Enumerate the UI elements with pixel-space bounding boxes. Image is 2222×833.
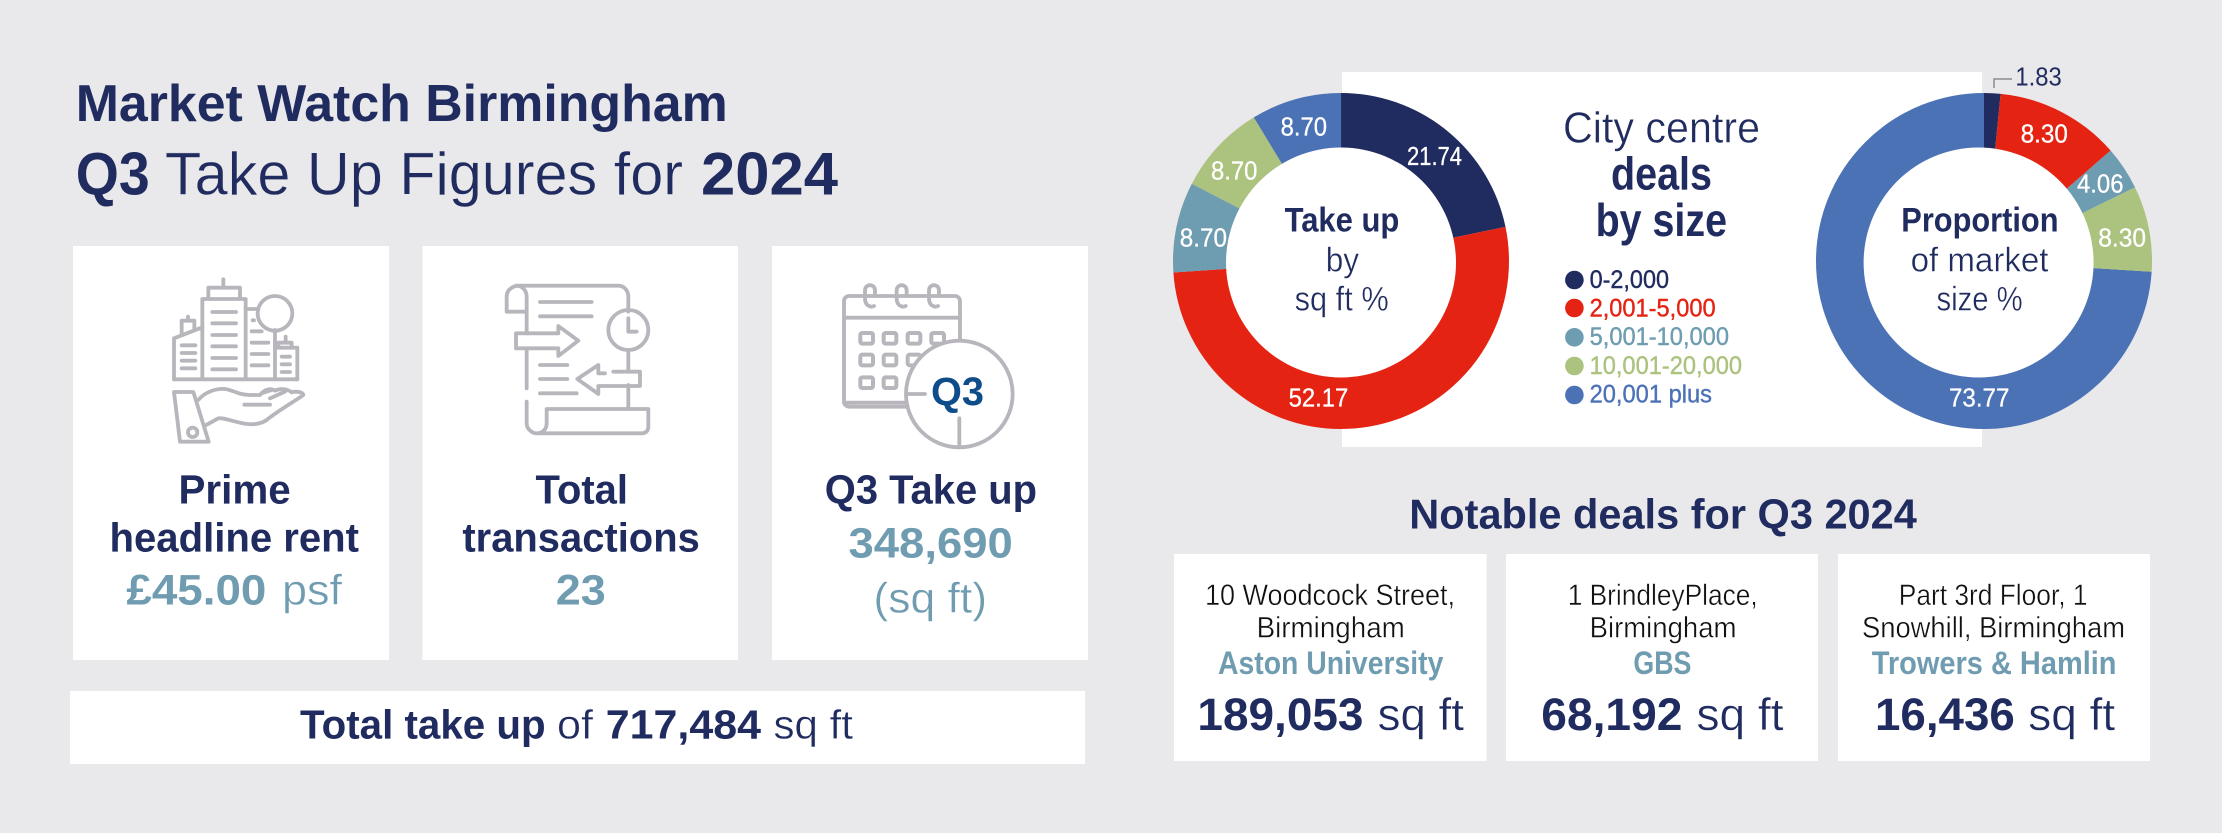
donut chart: take up by sq ft xyxy=(1180,114,1476,413)
heading: city centre deals by size: deals xyxy=(1611,148,1712,200)
legend: 0-2,000 xyxy=(1590,266,1669,294)
card text: Q3 take up: (sq ft) xyxy=(874,574,987,622)
card text: prime headline rent: Prime xyxy=(178,467,291,513)
deal card: GBS: GBS xyxy=(1633,645,1691,681)
card text: prime headline rent: psf xyxy=(282,567,343,615)
donut centre label: proportion of market size % xyxy=(1901,202,2058,319)
deal card: Aston University xyxy=(1174,554,1487,761)
legend: 20,001 plus xyxy=(1590,381,1712,409)
donut centre label: take up by sq ft %: sq ft % xyxy=(1295,281,1389,319)
deal card: GBS: 1 BrindleyPlace, xyxy=(1568,579,1758,612)
heading: city centre deals by size: City centre xyxy=(1563,104,1760,152)
title: Market Watch Birmingham xyxy=(76,75,728,133)
title: Take Up Figures for xyxy=(165,141,683,208)
total take up bar xyxy=(70,691,1085,764)
deal card: Aston University: Birmingham xyxy=(1257,611,1405,644)
legend: 10,001-20,000 xyxy=(1590,352,1742,380)
donut chart: proportion of market size: 4.06 xyxy=(2077,171,2124,199)
total take up bar: of xyxy=(557,702,594,748)
card text: total transactions: transactions xyxy=(462,514,700,560)
deal card: Trowers & Hamlin: sq ft xyxy=(2028,689,2116,740)
donut centre label: proportion of market size %: size % xyxy=(1936,281,2023,319)
donut chart: take up by sq ft: 52.17 xyxy=(1289,385,1348,413)
deal card: GBS xyxy=(1506,554,1818,761)
card text: prime headline rent: £45.00 xyxy=(126,567,266,615)
icon: calendar with Q3 clock: Q3 xyxy=(931,370,984,414)
deal card: Trowers & Hamlin: Part 3rd Floor, 1 xyxy=(1899,579,2088,612)
icon: calendar with Q3 clock xyxy=(844,285,1013,447)
deal card: Aston University: Aston University xyxy=(1218,645,1444,681)
legend: 5,001-10,000 xyxy=(1590,323,1729,351)
card text: prime headline rent: headline rent xyxy=(110,514,359,560)
panel: city centre deals by size xyxy=(1342,72,1982,447)
donut centre label: proportion of market size %: of market xyxy=(1911,242,2049,280)
donut centre label: take up by sq ft %: by xyxy=(1326,242,1359,280)
donut chart: proportion of market size xyxy=(1849,64,2146,413)
panel: total transactions xyxy=(422,246,738,660)
title: 2024 xyxy=(701,141,839,208)
deal card: Aston University: 189,053 xyxy=(1197,689,1364,740)
panel: prime headline rent xyxy=(73,246,389,660)
total take up bar: 717,484 xyxy=(606,702,761,748)
heading: city centre deals by size: by size xyxy=(1596,194,1727,246)
legend: 2,001-5,000 xyxy=(1590,295,1716,323)
card text: prime headline rent xyxy=(110,467,359,615)
deal card: Trowers & Hamlin: 16,436 xyxy=(1875,689,2015,740)
donut centre label: take up by sq ft % xyxy=(1285,202,1399,319)
donut centre label: proportion of market size %: Proportion xyxy=(1901,202,2058,240)
legend xyxy=(1565,266,1742,409)
heading: notable deals: Notable deals for Q3 2024 xyxy=(1409,490,1917,537)
card text: Q3 take up: 348,690 xyxy=(848,519,1013,567)
icon: buildings on hand xyxy=(174,279,303,442)
heading: city centre deals by size xyxy=(1563,104,1760,246)
deal card: GBS: Birmingham xyxy=(1590,611,1736,644)
card text: Q3 take up xyxy=(825,467,1037,622)
card text: total transactions xyxy=(462,467,700,615)
deal card: GBS: sq ft xyxy=(1696,689,1784,740)
donut chart: take up by sq ft: 8.70 xyxy=(1281,114,1327,142)
donut chart: take up by sq ft: 8.70 xyxy=(1211,157,1257,185)
title: Q3 xyxy=(76,141,150,208)
card text: Q3 take up: Q3 Take up xyxy=(825,467,1037,513)
donut chart: proportion of market size: 8.30 xyxy=(2098,225,2146,253)
deal card: Aston University: 10 Woodcock Street, xyxy=(1205,579,1455,612)
card text: total transactions: Total xyxy=(536,467,628,513)
deal card: GBS: 68,192 xyxy=(1541,689,1682,740)
deal card: Trowers & Hamlin: Trowers & Hamlin xyxy=(1872,645,2116,681)
deal card: Trowers & Hamlin: Snowhill, Birmingham xyxy=(1862,611,2125,644)
card text: total transactions: 23 xyxy=(556,567,606,615)
total take up bar: Total take up xyxy=(300,702,546,748)
deal card: Trowers & Hamlin xyxy=(1838,554,2150,761)
donut chart: proportion of market size: 73.77 xyxy=(1949,385,2009,413)
donut centre label: take up by sq ft %: Take up xyxy=(1285,202,1399,240)
total take up bar: sq ft xyxy=(774,702,854,748)
title xyxy=(76,75,839,208)
panel: Q3 take up xyxy=(772,246,1088,660)
deal card: Aston University: sq ft xyxy=(1378,689,1464,740)
donut chart: take up by sq ft: 21.74 xyxy=(1407,143,1462,171)
donut chart: take up by sq ft: 8.70 xyxy=(1180,225,1227,253)
icon: document with arrows and clock xyxy=(507,286,648,433)
donut chart: proportion of market size: 8.30 xyxy=(2021,120,2068,148)
donut chart: proportion of market size: 1.83 xyxy=(2015,64,2062,92)
